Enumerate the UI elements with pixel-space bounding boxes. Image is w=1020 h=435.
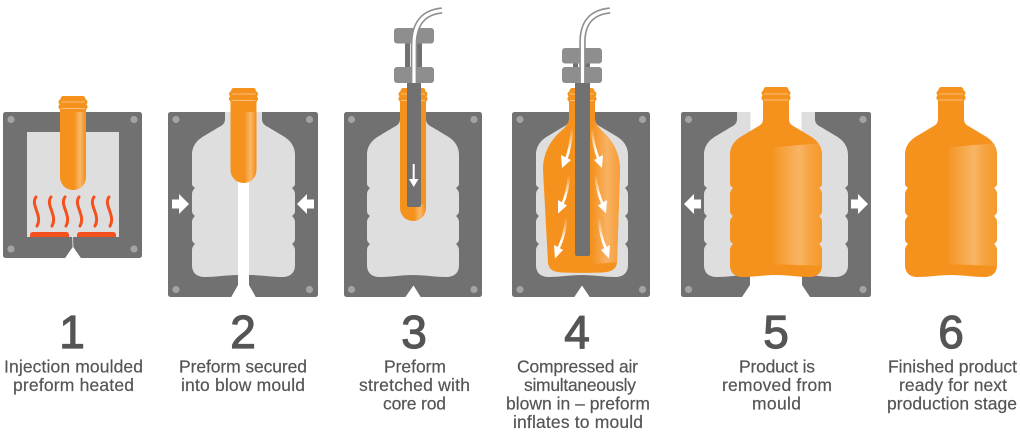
mould 5 bolts <box>685 116 867 293</box>
caption 1 <box>4 306 143 395</box>
mould 1 <box>3 112 142 258</box>
caption 1: Injection moulded <box>4 356 143 376</box>
caption 2 <box>179 306 307 395</box>
caption 3 <box>359 306 470 414</box>
clamp bars 4 <box>573 63 590 67</box>
preform 1 <box>58 96 88 190</box>
core rod <box>407 83 421 207</box>
mould 2 bolts <box>172 116 313 293</box>
stretched preform <box>398 88 428 222</box>
arrow heads <box>554 155 610 258</box>
step 2: preform secured into mould <box>168 88 318 298</box>
caption 3: Preform <box>384 356 446 376</box>
mould 4 bolts <box>516 116 646 293</box>
caption 5 <box>722 306 832 414</box>
arrows outward <box>684 194 868 214</box>
bottle 5 <box>730 87 822 277</box>
mould 1 cavity <box>27 132 119 237</box>
arrows inward <box>172 194 314 214</box>
mould 4 <box>512 112 650 297</box>
core rod 4 <box>575 83 590 256</box>
air tube <box>414 10 442 84</box>
caption 2: into blow mould <box>181 375 305 395</box>
step 4: compressed air inflates preform <box>512 10 650 298</box>
caption 6: production stage <box>887 394 1017 414</box>
caption 6: Finished product <box>888 356 1017 376</box>
clamp bars <box>405 43 422 67</box>
heaters <box>30 232 116 237</box>
mould 3 cavity <box>367 112 459 277</box>
caption 4: blown in – preform <box>506 394 650 414</box>
mould 4 notch <box>574 286 590 298</box>
left cavity <box>704 112 750 277</box>
air arrows <box>554 128 610 258</box>
caption 6: ready for next <box>899 375 1007 395</box>
heat waves <box>34 197 112 226</box>
mould 2 gap <box>231 180 256 298</box>
air tube 4 <box>582 10 610 84</box>
mould 3 notch <box>405 286 421 298</box>
rod arrow <box>409 164 418 187</box>
arrow shafts <box>558 128 606 249</box>
caption 5: mould <box>752 394 801 414</box>
caption 2: 2 <box>230 306 256 358</box>
left mould half <box>681 112 750 297</box>
right mould half <box>802 112 871 297</box>
caption 4: inflates to mould <box>513 412 643 432</box>
caption 2: Preform secured <box>179 356 307 376</box>
caption 4 <box>506 306 650 432</box>
caption 5: Product is <box>739 356 815 376</box>
caption 3: stretched with <box>359 375 470 395</box>
caption 1: 1 <box>59 306 85 358</box>
right cavity <box>802 112 848 277</box>
caption 4: simultaneously <box>524 375 636 395</box>
caption 3: 3 <box>401 306 427 358</box>
mould 3 bolts <box>348 116 478 293</box>
mould 4 cavity <box>536 112 628 277</box>
clamps <box>394 28 434 83</box>
mould 1 notch <box>65 237 81 258</box>
mould 3 <box>344 112 482 297</box>
caption 5: removed from <box>722 375 832 395</box>
caption 6 <box>887 306 1017 414</box>
preform 2 <box>229 88 258 183</box>
caption 4: 4 <box>564 306 590 358</box>
step 6: finished bottle <box>905 87 997 277</box>
step 1: preform heating <box>3 96 142 258</box>
clamps 4 <box>562 48 602 83</box>
caption 4: Compressed air <box>517 356 638 376</box>
step 3: preform stretched with core rod <box>344 10 482 298</box>
mould 1 bolts <box>7 116 138 253</box>
caption 5: 5 <box>763 306 789 358</box>
caption 1: preform heated <box>13 375 134 395</box>
inflating bottle <box>543 88 622 273</box>
mould 2 <box>168 112 318 297</box>
mould 2 cavity <box>192 112 295 277</box>
step 5: product removed from mould <box>681 87 871 297</box>
caption 3: core rod <box>383 394 446 414</box>
caption 6: 6 <box>938 306 964 358</box>
